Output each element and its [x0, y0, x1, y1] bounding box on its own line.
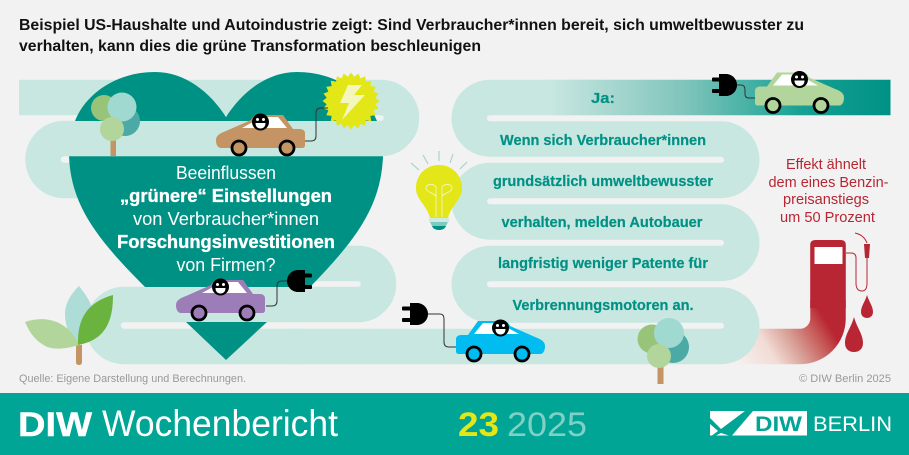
icon: tree top left — [91, 92, 140, 156]
heart text: von Verbraucher*innen — [133, 209, 319, 229]
icon: sprout — [25, 286, 113, 365]
answer text: Ja: — [591, 90, 615, 107]
icon: tree bottom — [638, 318, 689, 384]
car: purple — [176, 278, 265, 320]
icon: plug blue car — [402, 303, 428, 325]
heart text: „grünere“ Einstellungen — [120, 186, 332, 206]
heart text: Beeinflussen — [176, 163, 276, 183]
answer text: langfristig weniger Patente für — [498, 255, 708, 272]
icon: plug purple car — [287, 270, 312, 292]
heart text: von Firmen? — [176, 255, 276, 275]
answer text: grundsätzlich umweltbewusster — [493, 173, 713, 190]
heart text: Forschungsinvestitionen — [117, 232, 335, 252]
icon: fuel pump — [810, 233, 870, 308]
heart — [69, 72, 383, 360]
answer text: verhalten, melden Autobauer — [502, 214, 703, 231]
road: fuel section with gradient — [725, 300, 828, 346]
car: green — [755, 71, 844, 112]
road: left serpentine — [19, 98, 402, 346]
icon: charging badge — [322, 72, 380, 130]
cable: blue car to plug — [428, 314, 457, 347]
source note: Quelle: Eigene Darstellung und Berechnungen. — [19, 373, 246, 385]
footer band — [0, 393, 909, 455]
cable: green car to plug — [737, 85, 755, 98]
copyright: © DIW Berlin 2025 — [799, 373, 891, 385]
icon: light bulb — [411, 151, 467, 230]
answer text: Wenn sich Verbraucher*innen — [500, 132, 706, 149]
fuel text: um 50 Prozent — [780, 210, 875, 226]
cable: purple car to plug — [266, 281, 288, 306]
icon: fuel drops — [845, 295, 873, 352]
title — [19, 17, 804, 55]
footer: issue number — [458, 406, 587, 444]
road: right serpentine — [290, 98, 742, 346]
footer: DIW Berlin logo: BERLIN — [813, 413, 892, 436]
fuel text: dem eines Benzin- — [768, 175, 889, 191]
footer: issue number: 23 — [458, 406, 499, 444]
fuel text: Effekt ähnelt — [786, 157, 866, 173]
answer text: Verbrennungsmotoren an. — [512, 297, 694, 314]
footer: issue number: 2025 — [507, 406, 587, 444]
footer: publication name: Wochenbericht — [102, 403, 339, 444]
title: verhalten, kann dies die grüne Transformation beschleunigen — [19, 38, 481, 55]
footer: DIW Berlin logo: DIW — [755, 413, 802, 436]
icon: plug green car — [712, 74, 737, 96]
footer: publication name: DIW — [18, 406, 93, 444]
car: brown — [216, 114, 305, 155]
footer: DIW Berlin logo — [710, 411, 892, 436]
car: blue — [456, 320, 545, 361]
fuel text: preisanstiegs — [783, 192, 869, 208]
road: gradient end of the top lane — [550, 80, 890, 115]
cable: brown car to badge — [305, 108, 328, 141]
answer text — [493, 90, 713, 314]
title: Beispiel US-Haushalte und Autoindustrie zeigt: Sind Verbraucher*innen bereit, sich umweltbewusster zu — [19, 17, 804, 34]
fuel text — [768, 157, 889, 226]
heart text — [117, 163, 335, 275]
